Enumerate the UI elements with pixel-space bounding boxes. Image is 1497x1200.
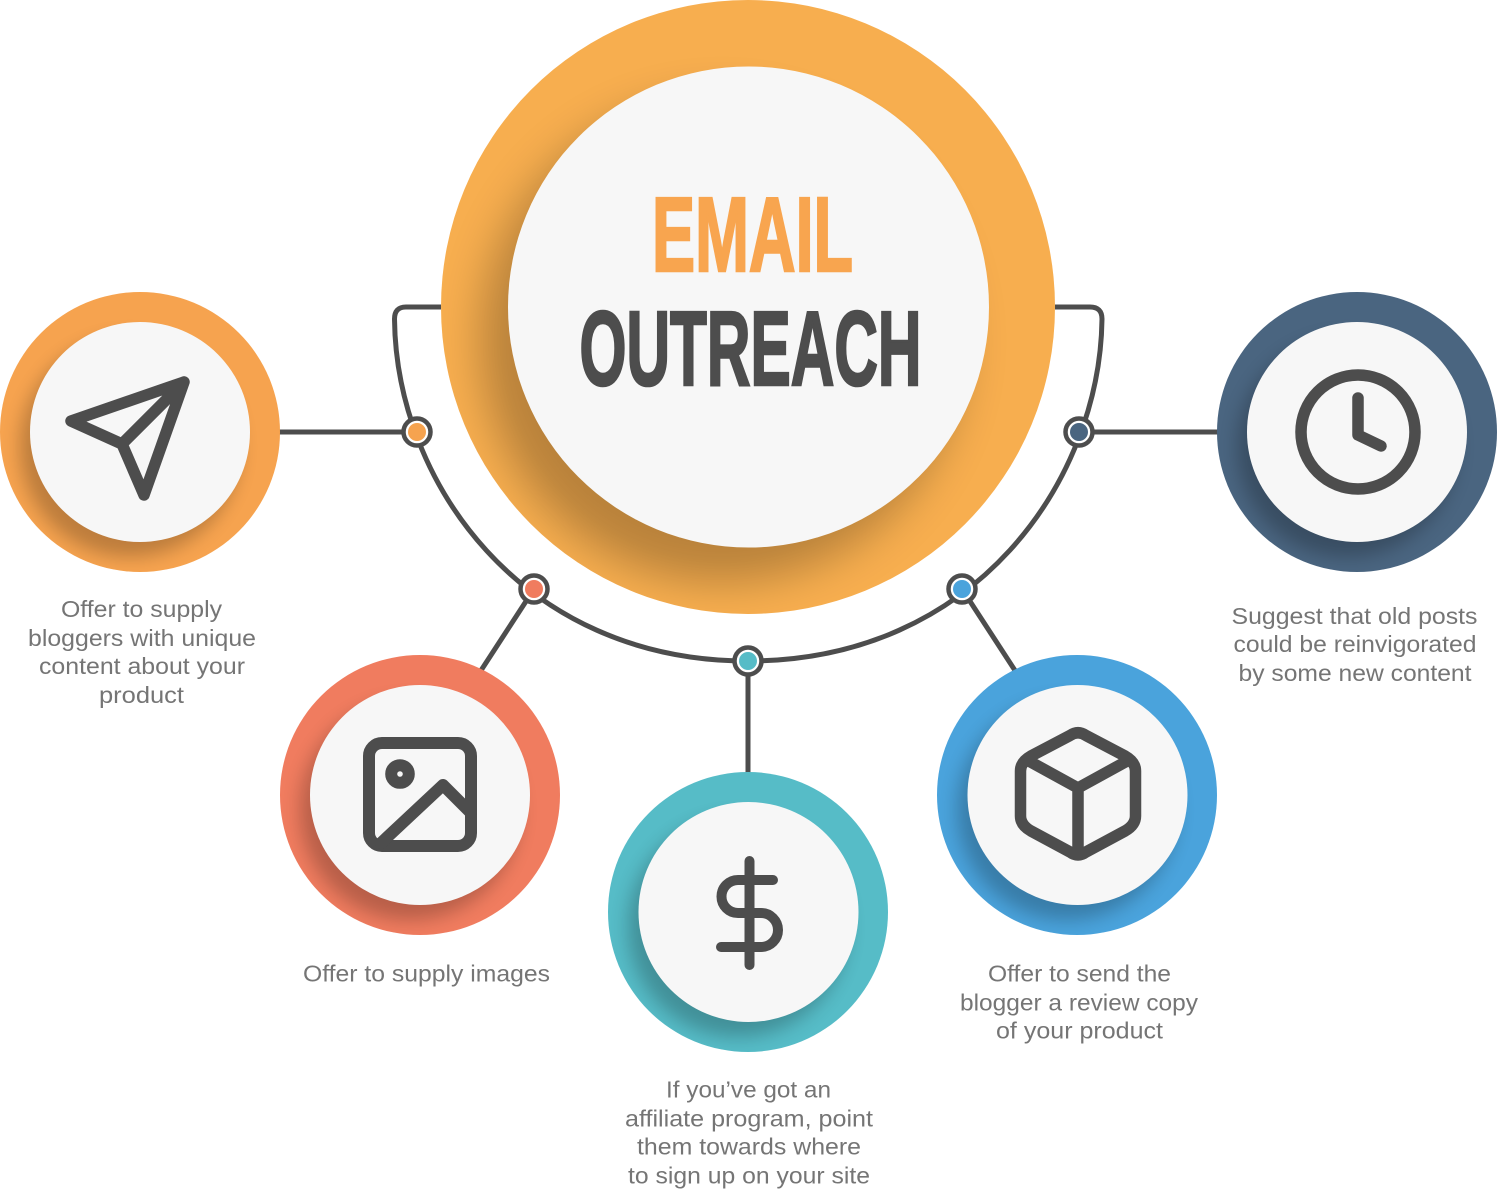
ring bbox=[937, 655, 1217, 935]
main ring bbox=[441, 0, 1055, 614]
panel: affiliate bbox=[608, 772, 888, 1188]
central circle bbox=[441, 0, 1055, 614]
ring shadow bbox=[1237, 337, 1457, 557]
node: coral bbox=[520, 576, 548, 602]
ring bbox=[1217, 292, 1497, 572]
inner disc bbox=[1247, 322, 1467, 542]
title: OUTREACH: OUTREACH bbox=[580, 290, 922, 408]
panel: old posts bbox=[1217, 292, 1497, 686]
main inner disc bbox=[508, 66, 989, 548]
text: review copy: of your product bbox=[996, 1018, 1164, 1044]
ring bbox=[608, 772, 888, 1052]
text: affiliate program: to sign up on your site bbox=[628, 1162, 870, 1188]
text: review copy: blogger a review copy bbox=[960, 990, 1199, 1016]
inner disc bbox=[968, 685, 1188, 905]
text: affiliate program: If you’ve got an bbox=[666, 1076, 831, 1102]
ring shadow bbox=[300, 700, 520, 920]
ring shadow bbox=[957, 700, 1177, 920]
text: offer content: product bbox=[99, 682, 185, 708]
ring bbox=[0, 292, 280, 572]
text: offer content: content about your bbox=[39, 653, 245, 679]
icon: box bbox=[1020, 733, 1136, 855]
main ring shadow bbox=[481, 100, 963, 582]
icon: paper plane bbox=[71, 382, 184, 495]
text: offer content: bloggers with unique bbox=[28, 625, 256, 651]
text: review copy: Offer to send the bbox=[988, 960, 1171, 986]
node: teal bbox=[734, 648, 762, 674]
panel: review copy bbox=[937, 655, 1217, 1044]
connector arc bbox=[394, 307, 1102, 661]
ring shadow bbox=[628, 817, 848, 1037]
title: EMAIL: EMAIL bbox=[652, 176, 853, 294]
inner disc bbox=[310, 685, 530, 905]
text: offer content: Offer to supply bbox=[61, 596, 223, 622]
ring shadow bbox=[20, 337, 240, 557]
text: affiliate program: affiliate program, point bbox=[625, 1106, 874, 1132]
icon: dollar bbox=[721, 861, 778, 965]
icon: clock bbox=[1301, 375, 1415, 489]
text: offer images: Offer to supply images bbox=[303, 960, 550, 986]
text: old posts: by some new content bbox=[1238, 660, 1472, 686]
node: blue bbox=[948, 576, 976, 602]
text: affiliate program: them towards where bbox=[637, 1134, 861, 1160]
panel: images bbox=[280, 655, 560, 986]
panel: send bbox=[0, 292, 280, 708]
node: orange bbox=[404, 418, 430, 446]
ring bbox=[280, 655, 560, 935]
text: old posts: could be reinvigorated bbox=[1234, 631, 1476, 657]
text: old posts: Suggest that old posts bbox=[1232, 603, 1478, 629]
inner disc bbox=[30, 322, 250, 542]
inner disc bbox=[638, 802, 858, 1022]
node: navy bbox=[1066, 418, 1092, 446]
connector lines bbox=[278, 432, 1220, 776]
icon: picture bbox=[369, 743, 471, 846]
